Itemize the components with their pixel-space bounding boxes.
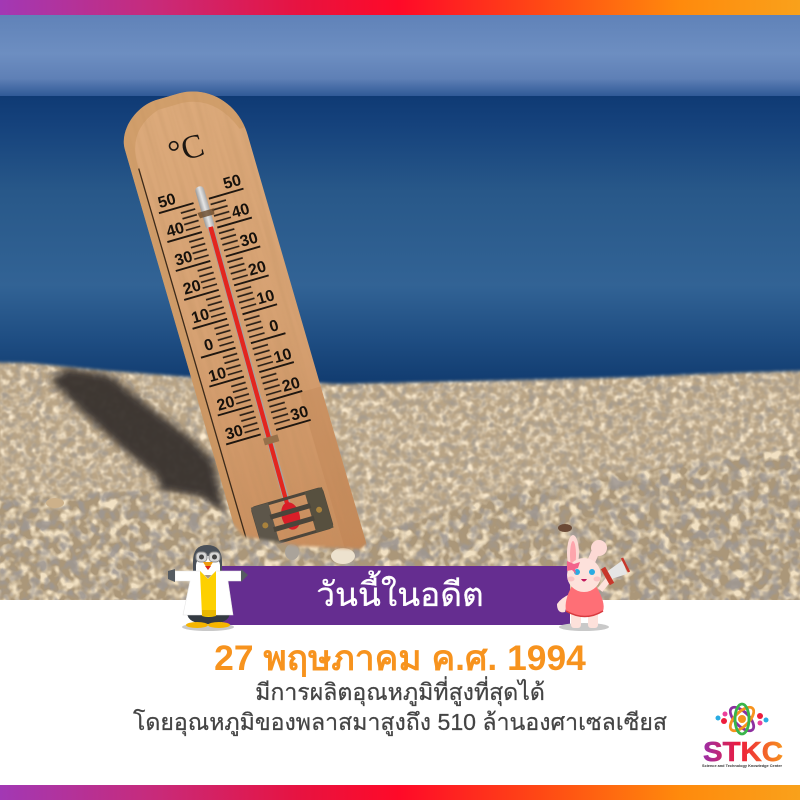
scale numbers: 50 — [156, 191, 178, 212]
top gradient bar — [0, 0, 800, 15]
near sand — [0, 430, 800, 600]
body text: โดยอุณหภูมิของพลาสมาสูงถึง 510 ล้านองศาเซลเซียส — [133, 709, 667, 735]
logo: STKC — [702, 702, 783, 768]
scale numbers: 10 — [255, 287, 277, 308]
scale numbers: 50 — [221, 172, 243, 193]
scale numbers — [156, 172, 311, 444]
body text — [133, 676, 667, 736]
scale numbers: 30 — [223, 422, 245, 444]
unit label: °C — [164, 127, 208, 172]
glass tube and red liquid — [187, 184, 306, 532]
scale ticks — [152, 187, 315, 446]
wooden body — [114, 78, 368, 584]
scale numbers: 40 — [230, 201, 252, 222]
scale numbers: 20 — [181, 277, 203, 299]
logo atom icon — [716, 703, 768, 735]
scale numbers: 20 — [280, 374, 302, 396]
scale numbers: 20 — [247, 258, 268, 280]
scale numbers: 0 — [202, 336, 216, 355]
scale numbers: 10 — [207, 365, 229, 386]
scale numbers: 10 — [272, 346, 294, 367]
logo wordmark: STKC — [703, 736, 783, 767]
scale numbers: 30 — [238, 229, 260, 251]
bottom gradient bar — [0, 785, 800, 800]
mascot: penguin in lab coat — [168, 545, 248, 631]
scale numbers: 0 — [268, 317, 281, 336]
metal bracket — [251, 487, 334, 548]
scale numbers: 30 — [173, 248, 195, 270]
body text: มีการผลิตอุณหภูมิที่สูงที่สุดได้ — [255, 679, 545, 705]
sky — [0, 0, 800, 98]
beach photo: thermometer in sand — [0, 15, 800, 600]
thermometer — [124, 92, 367, 550]
sea — [0, 96, 800, 387]
logo caption: Science and Technology Knowledge Center — [702, 763, 782, 768]
scale numbers: 20 — [215, 393, 237, 415]
mascot: rabbit with megaphone — [557, 535, 630, 631]
scale numbers: 30 — [289, 403, 311, 425]
scale numbers: 10 — [190, 306, 212, 327]
scale numbers: 40 — [164, 220, 186, 241]
banner title: วันนี้ในอดีต — [316, 577, 484, 614]
banner: purple title band — [222, 566, 570, 625]
far sand — [0, 360, 800, 546]
date heading: 27 พฤษภาคม ค.ศ. 1994 — [214, 638, 586, 678]
ground shadow of thermometer — [50, 368, 225, 515]
